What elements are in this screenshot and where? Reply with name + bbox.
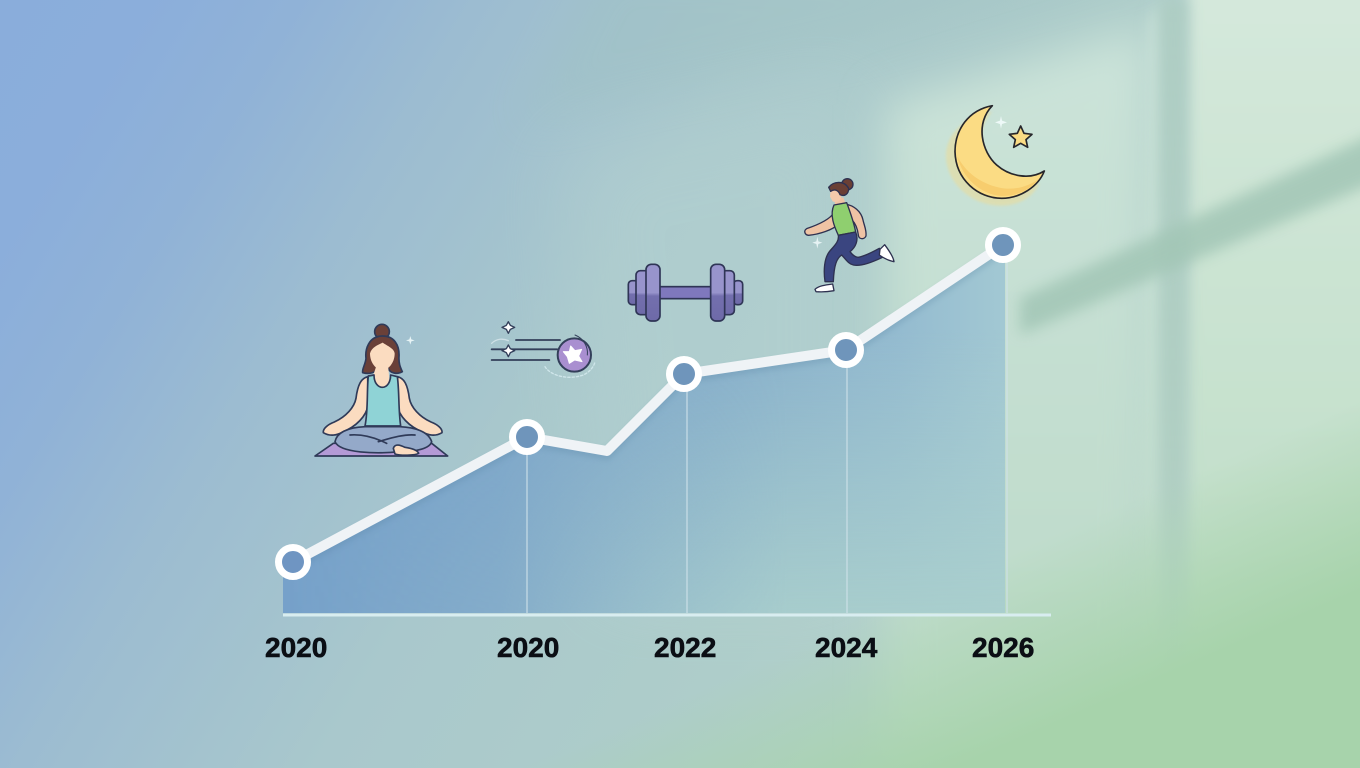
icon: meditating woman [315, 324, 448, 456]
line shadow [293, 249, 1003, 566]
year labels: 2020 [497, 632, 559, 663]
year labels: 2020 [265, 632, 327, 663]
year labels: 2024 [815, 632, 878, 663]
chart: wellness line over time [278, 230, 1051, 615]
data point 3 [670, 360, 698, 388]
year labels [265, 632, 1034, 663]
year labels: 2022 [654, 632, 716, 663]
year labels: 2026 [972, 632, 1034, 663]
icon: running woman [805, 179, 894, 292]
icon: crescent moon and star [946, 106, 1044, 206]
data point 5 [988, 230, 1018, 260]
icon: dumbbell [628, 264, 743, 321]
area under the line [283, 245, 1005, 613]
vertical drop lines [527, 258, 1007, 613]
trend line [293, 245, 1003, 562]
icon: shooting star badge [492, 322, 595, 377]
x axis baseline [283, 614, 1051, 616]
data point 2 [512, 422, 542, 452]
data point 1 [278, 548, 308, 576]
data point 4 [832, 336, 860, 364]
